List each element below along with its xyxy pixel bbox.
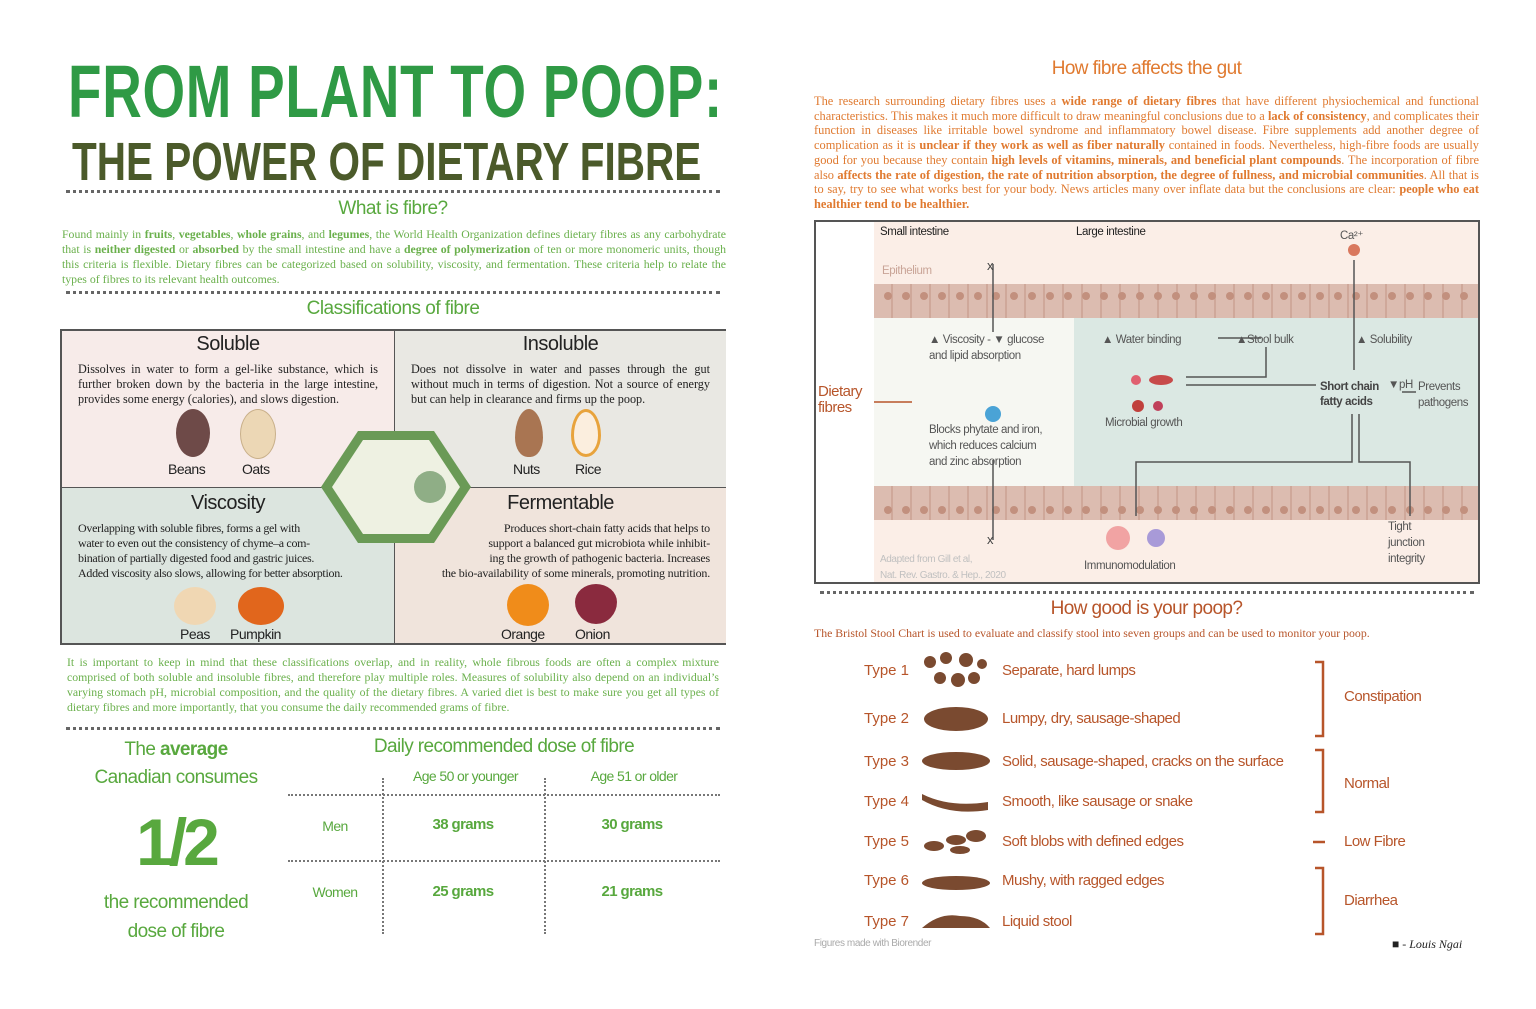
panel: viscosity: Added viscosity also slows, allowing for better absorption. — [78, 566, 343, 580]
chart: gut diagram: pathogens — [1418, 397, 1468, 409]
chart: gut diagram: Large intestine — [1076, 226, 1145, 238]
chart: bristol stool types: Liquid stool — [1002, 913, 1072, 930]
panel: classifications grid — [60, 329, 726, 645]
table: daily recommended dose: Age 51 or older — [591, 768, 677, 784]
callout: average canadian — [94, 739, 258, 942]
chart: bristol stool types: Type 2 — [864, 710, 909, 727]
callout: average canadian: 1/2 — [136, 805, 216, 879]
table: daily recommended dose: Daily recommended dose of fibre — [374, 736, 634, 757]
chart: gut diagram: Ca²⁺ — [1340, 230, 1363, 242]
table: daily recommended dose — [288, 736, 720, 934]
chart: bristol stool types: Separate, hard lumps — [1002, 662, 1135, 679]
chart: bristol stool types: Constipation — [1344, 688, 1421, 705]
chart: gut diagram: Adapted from Gill et al, — [880, 554, 972, 565]
panel: fermentable: the bio-availability of some minerals, promoting nutrition. — [442, 566, 710, 580]
icon: oats — [240, 409, 276, 459]
credit: ■ - Louis Ngai — [1392, 937, 1462, 951]
text: classifications note: It is important to keep in mind that these classifications overlap, and in reality, whole fibrous foods are often a complex mixture comprised of both soluble and insoluble fibres, and therefore play multiple roles. Measures of solubility also depend on an individual’s varying stomach pH, microbial composition, and the quality of the dietary fibres. A varied diet is best to make sure you get all types of dietary fibres and more importantly, that you consume the daily recommended grams of fibre. — [67, 655, 719, 714]
panel: insoluble: Nuts — [513, 461, 540, 477]
icon: rice — [571, 409, 601, 457]
chart: bristol stool types: Diarrhea — [1344, 892, 1398, 909]
table: daily recommended dose: 30 grams — [601, 816, 663, 833]
panel: soluble: Dissolves in water to form a gel-like substance, which is further broken down by the bacteria in the large intestine, provides some energy (calories), and slows digestion. — [78, 362, 378, 406]
chart: gut diagram: x — [987, 258, 994, 273]
icon: plant cell hexagon — [321, 431, 471, 543]
chart: gut diagram — [814, 220, 1480, 584]
chart: gut diagram: and lipid absorption — [929, 350, 1021, 362]
panel: soluble — [62, 331, 395, 488]
icon: orange — [507, 584, 549, 626]
panel: fermentable: Orange — [501, 626, 545, 642]
chart: gut diagram: junction — [1388, 537, 1424, 549]
icon: peas — [174, 587, 216, 625]
panel: insoluble: Rice — [575, 461, 601, 477]
chart: gut diagram: Prevents — [1418, 381, 1460, 393]
panel: viscosity — [62, 488, 395, 643]
icon: pumpkin — [238, 587, 284, 625]
panel: viscosity: water to even out the consistency of chyme–a com- — [78, 536, 310, 550]
table: daily recommended dose: 21 grams — [601, 883, 663, 900]
chart: gut diagram: ▲ Viscosity - ▼ glucose — [929, 334, 1044, 346]
callout: average canadian: dose of fibre — [128, 921, 224, 942]
panel: soluble: Oats — [242, 461, 270, 477]
chart: bristol stool types: Soft blobs with defined edges — [1002, 833, 1183, 850]
panel: insoluble — [395, 331, 726, 488]
panel: insoluble: Insoluble — [523, 333, 598, 355]
panel: viscosity: Overlapping with soluble fibres, forms a gel with — [78, 521, 300, 535]
chart: bristol stool types: Mushy, with ragged edges — [1002, 872, 1164, 889]
icon: beans — [176, 409, 210, 457]
table: daily recommended dose: 25 grams — [432, 883, 494, 900]
panel: insoluble: Does not dissolve in water and passes through the gut without much in terms of digestion. Not a source of energy but can help in clearance and firms up the poop. — [411, 362, 710, 406]
icon: nut — [515, 409, 543, 457]
footnote: Figures made with Biorender — [814, 938, 931, 949]
chart: gut diagram: Dietary — [818, 383, 862, 400]
heading: what is fibre: What is fibre? — [338, 198, 448, 219]
chart: gut diagram: Nat. Rev. Gastro. & Hep., 2020 — [880, 570, 1006, 581]
chart: bristol stool types: Solid, sausage-shaped, cracks on the surface — [1002, 753, 1284, 770]
chart: gut diagram: ▲ Solubility — [1356, 334, 1412, 346]
chart: bristol stool types: Lumpy, dry, sausage-shaped — [1002, 710, 1180, 727]
chart: gut diagram: Small intestine — [880, 226, 949, 238]
heading: how fibre affects the gut: How fibre affects the gut — [1052, 58, 1241, 79]
chart: bristol stool types: Type 6 — [864, 872, 909, 889]
text: gut intro: The research surrounding dietary fibres uses a wide range of dietary fibres that have different physiochemical and functional characteristics. This makes it much more difficult to draw meaningful conclusions due to a lack of consistency, and complicates their function in diseases like irritable bowel syndrome and inflammatory bowel disease. Fibre supplements add another degree of complication as it is unclear if they work as well as fiber naturally contained in foods. Nevertheless, high-fibre foods are usually good for you because they contain high levels of vitamins, minerals, and beneficial plant compounds. The incorporation of fibre also affects the rate of digestion, the rate of nutrition absorption, the degree of fullness, and microbial communities. All that is to say, try to see what works best for your body. News articles many over inflate data but the conclusions are clear: people who eat healthier tend to be healthier. — [814, 94, 1479, 211]
callout: average canadian: Canadian consumes — [94, 767, 258, 788]
panel: fermentable: Fermentable — [507, 492, 614, 514]
chart: gut diagram: Immunomodulation — [1084, 560, 1175, 572]
chart: bristol stool types: Type 7 — [864, 913, 909, 930]
table: daily recommended dose: Men — [322, 818, 348, 834]
title — [68, 50, 723, 192]
panel: viscosity: Viscosity — [191, 492, 265, 514]
callout: average canadian: The average — [124, 739, 228, 760]
chart: gut diagram: fatty acids — [1320, 396, 1372, 408]
chart: gut diagram: Tight — [1388, 521, 1411, 533]
chart: gut diagram: ▲Stool bulk — [1236, 334, 1294, 346]
chart: gut diagram: ▼pH — [1388, 379, 1413, 391]
chart: bristol stool types — [864, 652, 1421, 936]
chart: gut diagram: Microbial growth — [1105, 417, 1182, 429]
text: what is fibre: Found mainly in fruits, vegetables, whole grains, and legumes, the World Health Organization defines dietary fibres as any carbohydrate that is neither digested or absorbed by the small intestine and have a degree of polymerization of ten or more monomeric units, though this criteria is flexible. Dietary fibres can be categorized based on solubility, viscosity, and fermentation. These criteria help to relate the types of fibres to its relevant health outcomes. — [62, 227, 726, 286]
chart: gut diagram: and zinc absorption — [929, 456, 1021, 468]
callout: average canadian: the recommended — [104, 892, 248, 913]
table: daily recommended dose: 38 grams — [432, 816, 494, 833]
chart: bristol stool types: Smooth, like sausage or snake — [1002, 793, 1193, 810]
chart: bristol stool types: Type 5 — [864, 833, 909, 850]
panel: fermentable: Produces short-chain fatty acids that helps to — [504, 521, 710, 535]
panel: viscosity: bination of partially digested food and gastric juices. — [78, 551, 314, 565]
panel: viscosity: Pumpkin — [230, 626, 281, 642]
table: daily recommended dose: Women — [312, 884, 357, 900]
chart: gut diagram: Short chain — [1320, 381, 1379, 393]
chart: gut diagram: Epithelium — [882, 265, 932, 277]
panel: fermentable: ing the growth of pathogenic bacteria. Increases — [489, 551, 710, 565]
chart: gut diagram: fibres — [818, 399, 852, 416]
heading: how good is your poop: How good is your poop? — [1051, 598, 1242, 619]
chart: bristol stool types: Type 1 — [864, 662, 909, 679]
table: daily recommended dose: Age 50 or younger — [413, 768, 518, 784]
chart: gut diagram: integrity — [1388, 553, 1425, 565]
chart: gut diagram: ▲ Water binding — [1102, 334, 1181, 346]
panel: fermentable — [395, 488, 726, 643]
heading: classifications: Classifications of fibre — [307, 298, 479, 319]
text: bristol intro: The Bristol Stool Chart is used to evaluate and classify stool into seven groups and can be used to monitor your poop. — [814, 626, 1370, 640]
chart: gut diagram: which reduces calcium — [929, 440, 1036, 452]
title: THE POWER OF DIETARY FIBRE — [72, 132, 701, 192]
panel: soluble: Soluble — [196, 333, 260, 355]
chart: gut diagram: x — [987, 532, 994, 547]
icon: onion — [575, 584, 617, 624]
chart: bristol stool types: Type 4 — [864, 793, 909, 810]
chart: bristol stool types: Normal — [1344, 775, 1389, 792]
chart: gut diagram: Blocks phytate and iron, — [929, 424, 1042, 436]
title: FROM PLANT TO POOP: — [68, 50, 723, 133]
panel: fermentable: Onion — [575, 626, 610, 642]
panel: soluble: Beans — [168, 461, 205, 477]
chart: bristol stool types: Type 3 — [864, 753, 909, 770]
panel: viscosity: Peas — [180, 626, 210, 642]
panel: fermentable: support a balanced gut microbiota while inhibit- — [488, 536, 710, 550]
chart: bristol stool types: Low Fibre — [1344, 833, 1405, 850]
